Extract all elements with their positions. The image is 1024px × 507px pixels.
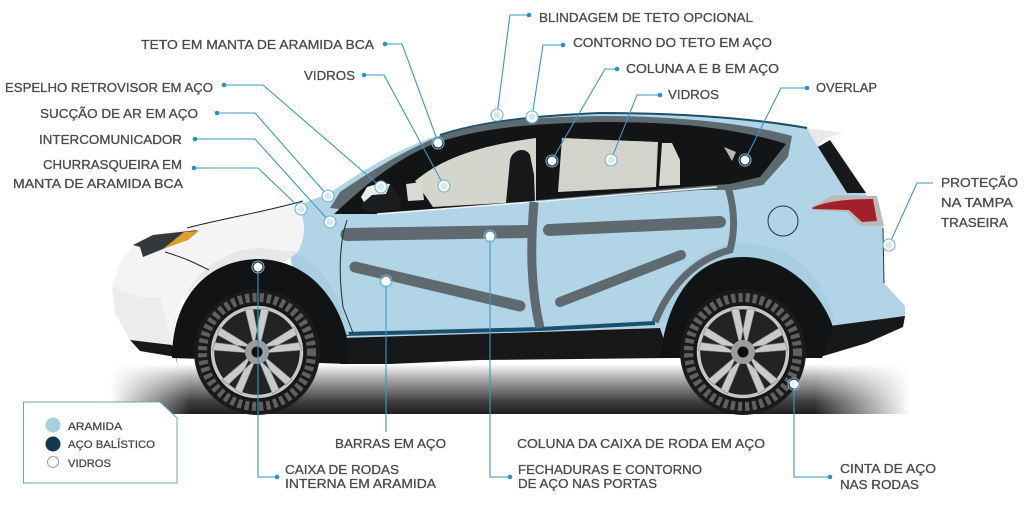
callout: caixa de rodas: [252, 261, 436, 491]
bumper shading: [112, 287, 172, 345]
rear bumper black: [820, 316, 905, 357]
window surround steel: [330, 116, 792, 214]
mirror: [362, 183, 402, 213]
callout: teto em manta: [141, 37, 444, 149]
door strip: front lower: [355, 267, 520, 306]
callout: vidros dianteiros: [304, 68, 450, 192]
quarter glass highlight: [724, 147, 736, 161]
callout: vidros traseiros: [605, 87, 719, 166]
callout: coluna A e B: [546, 61, 779, 167]
callout: vidros traseiros: VIDROS: [668, 87, 719, 102]
callout: contorno do teto: [526, 35, 772, 123]
car body: aramid area: [290, 113, 905, 345]
callout: cinta de aço: CINTA DE AÇO: [840, 461, 936, 476]
door strip: rear lower: [560, 255, 681, 302]
rear glass: [818, 140, 866, 193]
legend: [24, 402, 177, 483]
callout: barras em aço: [335, 275, 446, 451]
callout: sucção de ar: [40, 106, 334, 202]
door strip: rear upper: [549, 222, 720, 230]
callout: caixa de rodas: CAIXA DE RODAS: [285, 462, 399, 477]
callout: vidros dianteiros: VIDROS: [304, 68, 355, 83]
headlight amber strip: [163, 231, 199, 249]
callout: proteção na tampa traseira: NA TAMPA: [941, 195, 1013, 210]
door seams: [340, 220, 353, 333]
tail light chrome: [812, 195, 884, 226]
callout: barras em aço: BARRAS EM AÇO: [335, 436, 446, 451]
callout: fechaduras: FECHADURAS E CONTORNO: [518, 462, 702, 477]
callout: blindagem de teto: BLINDAGEM DE TETO OPCIONAL: [539, 10, 753, 25]
callout: overlap: [739, 80, 877, 166]
tailgate line: [883, 228, 884, 283]
rear wheel arch: [660, 257, 833, 358]
ground shadow: [110, 364, 910, 414]
callout: intercomunicador: INTERCOMUNICADOR: [39, 132, 182, 147]
window surround black: [334, 122, 786, 214]
callout: churrasqueira: [13, 157, 307, 215]
front wheel: [194, 289, 320, 415]
roof steel edge: [440, 113, 807, 135]
spoiler: [807, 128, 843, 146]
front arch flare on blue: [290, 252, 349, 335]
callout: proteção na tampa traseira: [883, 175, 1018, 251]
tail light: [812, 199, 877, 222]
white fender flare: [172, 248, 298, 340]
callout: fechaduras: [484, 230, 702, 491]
callout: churrasqueira: CHURRASQUEIRA EM: [43, 157, 182, 172]
white front of car: [112, 205, 304, 345]
sill black: [340, 328, 670, 364]
legend: ARAMIDA: [68, 421, 123, 433]
rear wheel: [680, 289, 806, 415]
front bumper black: [130, 340, 178, 366]
callout: fechaduras: DE AÇO NAS PORTAS: [518, 476, 657, 491]
callout: cinta de aço: NAS RODAS: [840, 477, 919, 492]
callout: coluna A e B: COLUNA A E B EM AÇO: [626, 61, 779, 76]
headlight: [133, 230, 198, 257]
hood line: [165, 201, 303, 270]
rear door glass: [558, 138, 658, 192]
label: coluna da caixa de roda: COLUNA DA CAIXA DE RODA EM AÇO: [517, 436, 765, 451]
callout: sucção de ar: SUCÇÃO DE AR EM AÇO: [40, 106, 198, 121]
callout: overlap: OVERLAP: [816, 80, 877, 95]
rear arch flare: [655, 243, 835, 322]
front door glass: [415, 138, 536, 207]
fuel cap: [768, 206, 798, 236]
legend: AÇO BALÍSTICO: [68, 438, 155, 451]
callout: contorno do teto: CONTORNO DO TETO EM AÇO: [573, 35, 772, 50]
callout: proteção na tampa traseira: PROTEÇÃO: [941, 175, 1018, 190]
callout: proteção na tampa traseira: TRASEIRA: [941, 215, 1008, 230]
callout: cinta de aço: [788, 378, 936, 492]
front wheel arch: [172, 259, 349, 364]
rear door edge: [655, 187, 734, 322]
callout: churrasqueira: MANTA DE ARAMIDA BCA: [13, 176, 183, 191]
front headrest: [406, 182, 424, 201]
door strip: front upper: [347, 232, 527, 234]
rear door small glass: [659, 143, 680, 186]
sill steel edge: [345, 323, 655, 334]
legend: VIDROS: [68, 458, 111, 470]
car illustration: [112, 113, 905, 415]
callout: espelho retrovisor: ESPELHO RETROVISOR EM AÇO: [5, 80, 213, 95]
callout: blindagem de teto: [491, 10, 753, 121]
front seat: [506, 150, 535, 203]
callout: teto em manta: TETO EM MANTA DE ARAMIDA BCA: [141, 37, 374, 52]
belt line: [377, 187, 717, 214]
callout: intercomunicador: [39, 132, 336, 228]
door pillar: [532, 202, 540, 328]
callout: espelho retrovisor: [5, 80, 387, 193]
callout: caixa de rodas: INTERNA EM ARAMIDA: [285, 476, 436, 491]
mirror cap: [361, 184, 390, 202]
